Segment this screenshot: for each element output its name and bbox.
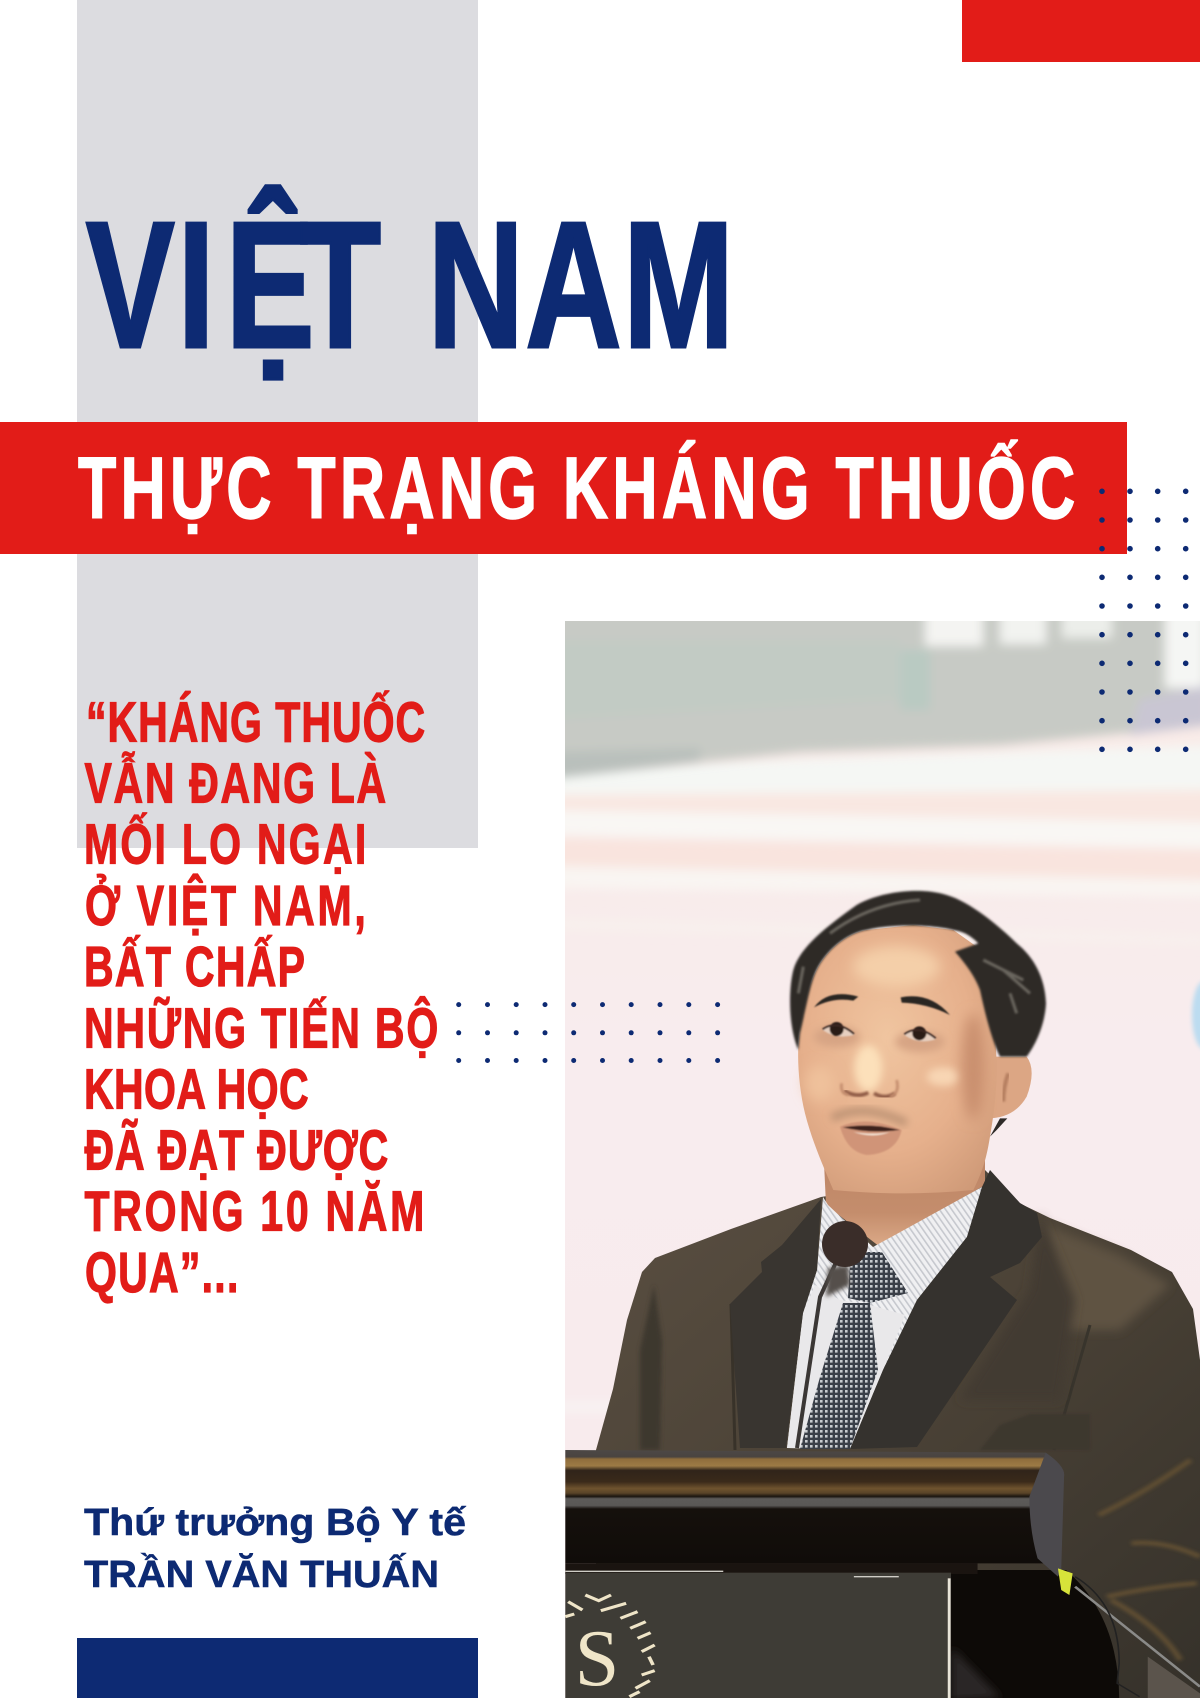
quote line 7: KHOA HỌC bbox=[84, 1057, 309, 1121]
navy footer block bbox=[77, 1638, 478, 1698]
subtitle: THỰC TRẠNG KHÁNG THUỐC bbox=[78, 440, 1075, 538]
quote line 5: BẤT CHẤP bbox=[84, 934, 305, 999]
lectern rail bbox=[565, 1450, 1046, 1563]
title: VIỆT NAM bbox=[86, 184, 734, 386]
front panel bbox=[565, 1573, 951, 1698]
face bbox=[798, 925, 997, 1193]
attribution role: Thứ trưởng Bộ Y tế bbox=[84, 1502, 467, 1544]
quote line 9: TRONG 10 NĂM bbox=[84, 1179, 424, 1243]
dot grid: middle bbox=[456, 1002, 720, 1063]
hair bbox=[790, 891, 1046, 1057]
right lapel bbox=[850, 1170, 1042, 1449]
cables bbox=[1075, 1587, 1200, 1687]
quote line 6: NHỮNG TIẾN BỘ bbox=[84, 995, 438, 1060]
quote line 4: Ở VIỆT NAM, bbox=[85, 872, 366, 938]
photo background screen bbox=[555, 610, 1200, 1698]
mouth bbox=[840, 1122, 902, 1155]
podium side shadow bbox=[951, 1570, 1119, 1698]
attribution name: TRẦN VĂN THUẤN bbox=[84, 1552, 439, 1596]
necktie bbox=[800, 1252, 908, 1449]
head bbox=[790, 891, 1046, 1193]
jacket folds bbox=[1099, 1460, 1200, 1660]
dot grid: right bbox=[1099, 488, 1188, 752]
yellow clip bbox=[1058, 1568, 1073, 1595]
shirt bbox=[787, 1187, 982, 1449]
quote line 8: ĐÃ ĐẠT ĐƯỢC bbox=[84, 1118, 388, 1182]
quote line 1: “KHÁNG THUỐC bbox=[86, 689, 425, 754]
red title band bbox=[0, 422, 1127, 554]
nose bbox=[844, 1091, 895, 1097]
quote line 10: QUA”... bbox=[85, 1240, 238, 1305]
left lapel bbox=[730, 1199, 821, 1448]
quote line 2: VẪN ĐANG LÀ bbox=[84, 751, 386, 815]
photo: speaker at podium bbox=[555, 610, 1200, 1698]
eyes bbox=[823, 1022, 936, 1041]
logo ticks bbox=[565, 1595, 655, 1697]
moustache stubble bbox=[832, 1111, 907, 1123]
attribution bbox=[84, 1502, 467, 1596]
eyebrows bbox=[814, 994, 950, 1015]
quote bbox=[84, 689, 438, 1305]
top-right red block bbox=[962, 0, 1200, 62]
lower rail ledge bbox=[565, 1563, 978, 1574]
podium bbox=[565, 1450, 1200, 1698]
suit jacket bbox=[596, 1170, 1200, 1698]
ear bbox=[992, 1056, 1032, 1118]
microphone bbox=[797, 1221, 868, 1448]
quote line 3: MỐI LO NGẠI bbox=[84, 811, 366, 876]
neck bbox=[824, 1160, 985, 1245]
rail end cap bbox=[1029, 1453, 1064, 1577]
grey background panel bbox=[77, 0, 478, 848]
